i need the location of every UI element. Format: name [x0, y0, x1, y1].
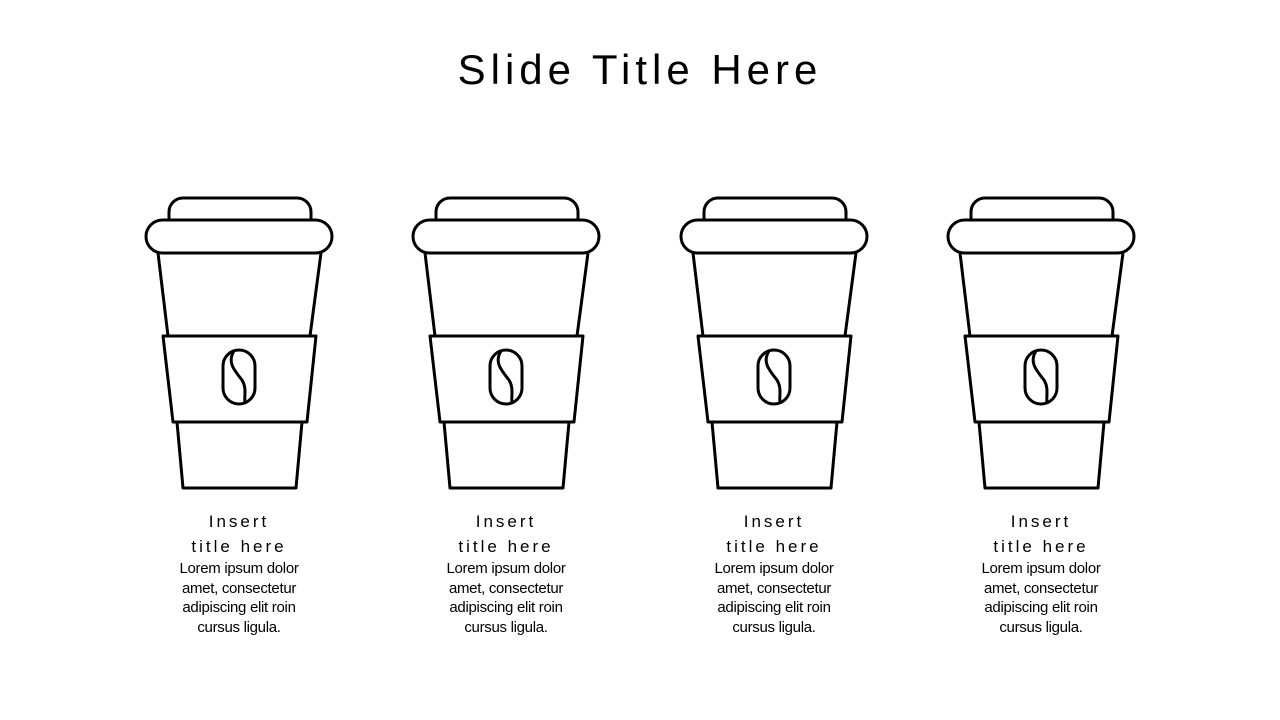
caption 4: Insert: [1011, 512, 1071, 531]
caption 4: adipiscing elit roin: [984, 599, 1098, 616]
caption 1: [179, 512, 299, 636]
caption 2: cursus ligula.: [464, 618, 548, 636]
caption 2: adipiscing elit roin: [449, 599, 563, 616]
caption 4: title here: [993, 537, 1089, 556]
caption 3: Lorem ipsum dolor: [714, 560, 834, 577]
caption 1: Lorem ipsum dolor: [179, 560, 299, 577]
caption 1: amet, consectetur: [182, 580, 296, 596]
caption 1: adipiscing elit roin: [182, 599, 296, 616]
caption 3: adipiscing elit roin: [717, 599, 831, 616]
caption 2: title here: [458, 537, 554, 556]
cup 2: [413, 198, 599, 488]
cup 1: [146, 198, 332, 488]
caption 3: title here: [726, 537, 822, 556]
title: Slide Title Here: [458, 46, 822, 93]
caption 1: cursus ligula.: [197, 618, 281, 636]
caption 2: Lorem ipsum dolor: [446, 560, 566, 577]
caption 2: amet, consectetur: [449, 580, 563, 596]
caption 2: [446, 512, 566, 636]
caption 3: [714, 512, 834, 636]
caption 4: [981, 512, 1101, 636]
cup 3: [681, 198, 867, 488]
caption 4: cursus ligula.: [999, 618, 1083, 636]
caption 3: Insert: [744, 512, 804, 531]
caption 1: title here: [191, 537, 287, 556]
caption 3: amet, consectetur: [717, 580, 831, 596]
caption 3: cursus ligula.: [732, 618, 816, 636]
caption 2: Insert: [476, 512, 536, 531]
cup 4: [948, 198, 1134, 488]
caption 4: amet, consectetur: [984, 580, 1098, 596]
caption 1: Insert: [209, 512, 269, 531]
caption 4: Lorem ipsum dolor: [981, 560, 1101, 577]
